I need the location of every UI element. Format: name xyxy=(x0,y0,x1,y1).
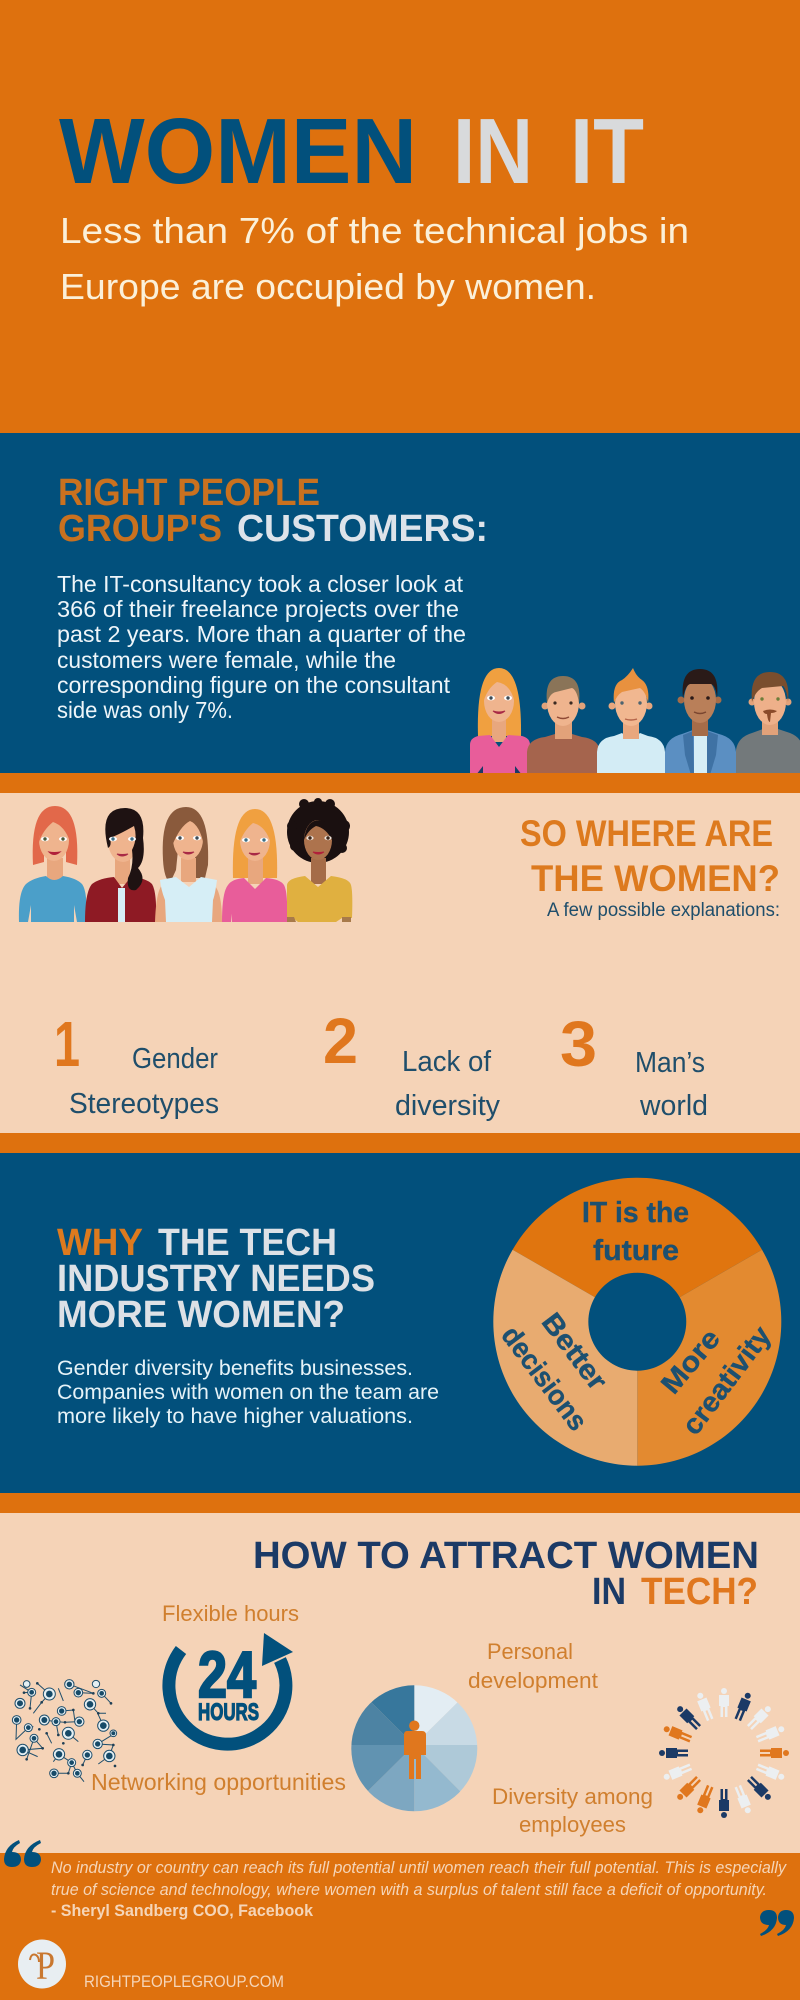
item 1: gender stereotypes: Stereotypes xyxy=(69,1088,219,1120)
item 3: man's world: world xyxy=(639,1090,708,1122)
item 1: gender stereotypes: 1 xyxy=(54,1008,80,1080)
label: IT is the future: future xyxy=(593,1235,679,1267)
label: better decisions: decisions xyxy=(496,1320,594,1436)
logo xyxy=(18,1940,66,1988)
item 2: lack of diversity: diversity xyxy=(395,1090,500,1122)
item 2: lack of diversity: 2 xyxy=(323,1005,358,1077)
icon: 24 hours: HOURS xyxy=(198,1699,259,1726)
item 2: lack of diversity: Lack of xyxy=(402,1046,492,1078)
footer url: RIGHTPEOPLEGROUP.COM xyxy=(84,1972,284,1991)
icon: network of people xyxy=(12,1680,117,1782)
subtitle: Less than 7% of the technical jobs in xyxy=(60,210,689,251)
text block: sheryl sandberg quote xyxy=(51,1858,787,1920)
icon: ring of diverse employees xyxy=(659,1688,789,1818)
text: a few possible explanations: A few possible explanations: xyxy=(547,900,780,921)
text block: customers description: customers were female, while the xyxy=(57,647,396,673)
title: WOMEN xyxy=(59,99,417,203)
text block: sheryl sandberg quote: - Sheryl Sandberg COO, Facebook xyxy=(51,1901,314,1920)
text block: customers description: past 2 years. More than a quarter of the xyxy=(57,621,466,647)
panel: how to attract women in tech xyxy=(0,1513,800,1853)
item 2: lack of diversity xyxy=(323,1005,500,1122)
text block: customers description: corresponding figure on the consultant xyxy=(57,672,451,698)
heading: why the tech industry needs more women xyxy=(57,1222,375,1336)
heading: so where are the women: THE WOMEN? xyxy=(531,858,780,899)
logo: P xyxy=(36,1943,55,1988)
heading: right people group's customers: RIGHT PEOPLE xyxy=(58,472,320,514)
title: IN xyxy=(453,99,533,203)
item 3: man's world xyxy=(560,1008,708,1122)
panel: quote and footer xyxy=(0,1840,800,2000)
heading: right people group's customers xyxy=(58,472,488,550)
icon: personal development fan xyxy=(351,1685,478,1812)
title: IT xyxy=(570,99,644,203)
icon: opening quote mark xyxy=(4,1840,41,1867)
heading: how to attract women in tech xyxy=(253,1535,759,1613)
heading: so where are the women xyxy=(520,813,780,899)
item 1: gender stereotypes: Gender xyxy=(132,1043,218,1075)
text block: customers description: 366 of their freelance projects over the xyxy=(57,596,459,622)
label: diversity among employees: employees xyxy=(519,1812,626,1837)
label: IT is the future: IT is the xyxy=(582,1197,689,1229)
title xyxy=(59,99,644,203)
heading: why the tech industry needs more women: INDUSTRY NEEDS xyxy=(57,1258,375,1300)
panel: why the tech industry needs more women xyxy=(0,1153,800,1493)
label: diversity among employees: Diversity among xyxy=(492,1784,653,1809)
label: more creativity: creativity xyxy=(676,1320,777,1440)
label: better decisions: Better xyxy=(536,1307,614,1396)
subtitle xyxy=(60,210,689,307)
label: networking opportunities: Networking opportunities xyxy=(91,1769,346,1795)
item 3: man's world: Man’s xyxy=(635,1047,705,1079)
text block: sheryl sandberg quote: true of science and technology, where women with a surplus of talent still face a deficit of opportunity. xyxy=(51,1880,767,1899)
item 3: man's world: 3 xyxy=(560,1008,597,1080)
icon: 24 hours: 24 xyxy=(198,1638,256,1711)
label: diversity among employees xyxy=(492,1784,653,1837)
text block: gender diversity benefits: Companies with women on the team are xyxy=(57,1381,439,1404)
illustration: group of women xyxy=(19,798,352,922)
chart: donut of reasons xyxy=(493,1178,781,1466)
heading: how to attract women in tech: TECH? xyxy=(641,1571,758,1613)
heading: why the tech industry needs more women: THE TECH xyxy=(158,1222,337,1264)
label: personal development xyxy=(468,1639,598,1693)
icon: 24 hours xyxy=(169,1633,293,1744)
heading: how to attract women in tech: IN xyxy=(592,1571,626,1613)
text block: gender diversity benefits xyxy=(57,1357,439,1428)
subtitle: Europe are occupied by women. xyxy=(60,266,596,307)
heading: why the tech industry needs more women: MORE WOMEN? xyxy=(57,1294,345,1336)
heading: how to attract women in tech: HOW TO ATTRACT WOMEN xyxy=(253,1535,759,1577)
label: personal development: development xyxy=(468,1668,598,1693)
heading: right people group's customers: CUSTOMERS: xyxy=(237,508,488,550)
text block: customers description: side was only 7%. xyxy=(57,697,233,723)
label: personal development: Personal xyxy=(487,1639,573,1664)
label: IT is the future xyxy=(582,1197,689,1267)
heading: right people group's customers: GROUP'S xyxy=(58,508,222,550)
text block: gender diversity benefits: more likely to have higher valuations. xyxy=(57,1405,413,1428)
illustration: group of consultants xyxy=(470,668,800,777)
item 1: gender stereotypes xyxy=(54,1008,219,1120)
panel: hero xyxy=(0,0,800,433)
heading: why the tech industry needs more women: WHY xyxy=(57,1222,143,1264)
heading: so where are the women: SO WHERE ARE xyxy=(520,813,773,854)
label: more creativity: More xyxy=(655,1323,726,1400)
label: flexible hours: Flexible hours xyxy=(162,1601,299,1626)
icon: closing quote mark xyxy=(760,1910,794,1936)
text block: customers description xyxy=(57,571,466,723)
text block: gender diversity benefits: Gender diversity benefits businesses. xyxy=(57,1357,413,1380)
panel: customers xyxy=(0,433,800,777)
text block: customers description: The IT-consultancy took a closer look at xyxy=(57,571,464,597)
panel: where are the women xyxy=(0,793,800,1133)
